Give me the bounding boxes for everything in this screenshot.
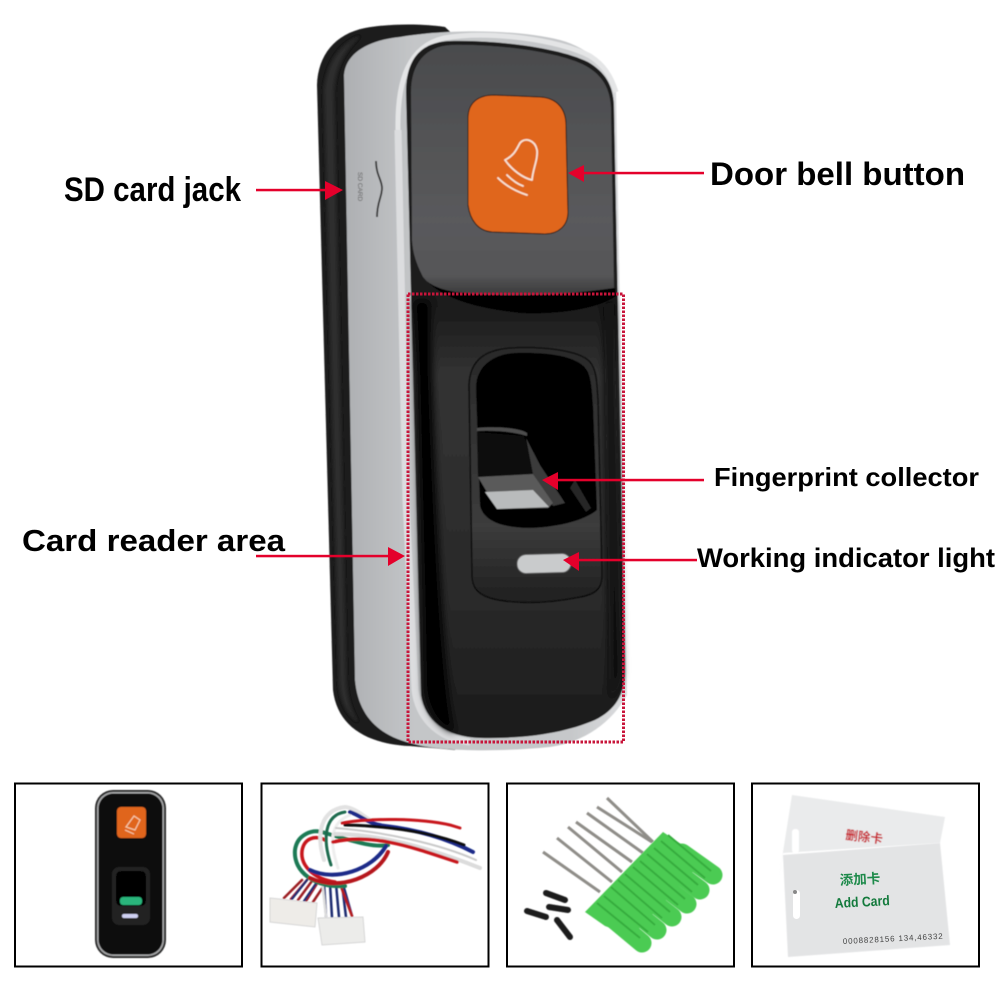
plug body block	[585, 832, 702, 936]
small indicator	[122, 914, 138, 918]
small upper panel	[102, 795, 159, 856]
red wire loop	[302, 838, 335, 882]
thumbnail: reader front view	[15, 784, 242, 966]
blue and black wires	[350, 812, 473, 852]
green wire	[295, 831, 388, 886]
small bell icon	[125, 816, 140, 834]
front add card	[783, 843, 950, 957]
front add card: Add Card	[834, 892, 890, 911]
front add card: 0008828156 134,46332	[843, 932, 944, 946]
small orange button	[117, 807, 146, 838]
connector leads	[284, 880, 325, 902]
card reader area dotted box	[408, 294, 624, 742]
lighter edge on rear housing	[324, 36, 360, 722]
rear black housing	[317, 24, 480, 750]
label: Fingerprint collector	[542, 462, 979, 492]
white wire arch	[320, 807, 370, 860]
green wall plugs	[585, 832, 713, 943]
label: Door bell button	[568, 156, 965, 192]
front add card: 添加卡	[839, 871, 881, 888]
door bell button	[468, 95, 568, 234]
sensor well	[477, 427, 591, 512]
upper grey panel	[411, 45, 614, 295]
silver side shell	[344, 31, 627, 750]
label: Fingerprint collector: Fingerprint collector	[714, 462, 979, 492]
label: Door bell button: Door bell button	[710, 156, 965, 192]
arrow: card reader area	[256, 547, 405, 566]
main product: fingerprint access reader	[317, 24, 627, 750]
label: Working indicator light	[563, 543, 995, 573]
left face shading	[414, 300, 455, 733]
long screws	[543, 798, 653, 892]
lower red wire	[333, 839, 457, 862]
white connectors	[270, 898, 365, 945]
thumbnail: RFID cards	[752, 784, 979, 966]
right face shadow	[604, 300, 622, 700]
rear delete card	[777, 795, 945, 890]
arrow: fingerprint collector	[542, 472, 704, 490]
label: Card reader area: Card reader area	[22, 523, 286, 558]
arrow: SD card jack	[256, 181, 343, 200]
label: Working indicator light: Working indicator light	[697, 543, 995, 573]
green sensor glow	[120, 897, 142, 905]
arrow: door bell button	[568, 165, 704, 182]
SD card slot mark: SD CARD	[356, 172, 363, 202]
upper red wire	[342, 819, 460, 828]
white wires bundle	[335, 834, 480, 868]
icon: bell	[498, 140, 537, 195]
bright chrome trim	[398, 35, 616, 130]
black short screws	[527, 893, 570, 937]
label: Card reader area	[22, 523, 405, 566]
brow shadow under panel	[423, 277, 616, 313]
fingerprint module frame	[469, 348, 602, 602]
small fingerprint window	[112, 867, 150, 925]
black front face	[406, 41, 625, 738]
working indicator light	[517, 553, 571, 574]
SD card slot mark	[356, 161, 382, 217]
label: SD card jack: SD card jack	[64, 171, 241, 209]
small reader body	[95, 790, 166, 958]
rear delete card: 删除卡	[845, 827, 884, 847]
thumbnail: screws and wall plugs	[507, 784, 734, 966]
fingerprint window	[476, 353, 597, 528]
thumbnail: connector wires	[262, 784, 488, 966]
arrow: working indicator light	[563, 552, 697, 571]
